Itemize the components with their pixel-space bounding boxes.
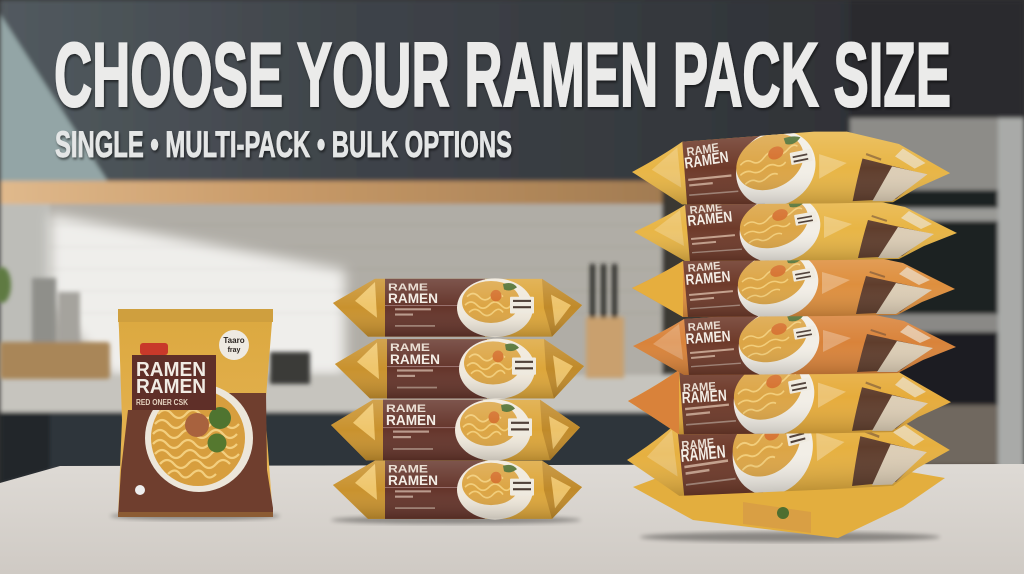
wooden bowl xyxy=(0,342,110,379)
bulk pack 7 (bottom, plain yellow) xyxy=(633,462,945,538)
bulk pack 1: RAMEN xyxy=(684,149,730,173)
multi pack 4: RAME xyxy=(388,464,428,475)
pack shadow xyxy=(110,512,280,520)
bulk pack 4: RAME xyxy=(687,320,721,334)
multi pack 3 xyxy=(331,399,580,461)
bulk pack 3 xyxy=(632,241,955,329)
multi pack 4: RAMEN xyxy=(388,473,438,488)
bulk pack 5: RAMEN xyxy=(681,387,727,408)
multi pack 3: RAMEN xyxy=(386,412,436,428)
bulk pack 6: RAMEN xyxy=(680,442,726,466)
back counter xyxy=(0,375,680,413)
multi pack 3: RAME xyxy=(386,402,426,415)
marble counter top xyxy=(0,464,1024,574)
bulk pack 1 xyxy=(632,119,950,218)
bulk pack 4 xyxy=(633,299,956,387)
multi pack 2: RAME xyxy=(390,343,430,354)
multi-pack stack xyxy=(331,278,584,524)
bulk pack 6: RAME xyxy=(681,437,715,454)
barcode mark xyxy=(135,485,145,495)
bulk pack 2: RAME xyxy=(689,202,723,217)
bulk pack 2: RAMEN xyxy=(687,208,733,230)
multi pack 1: RAMEN xyxy=(388,291,438,306)
sunlight wedge on cabinets xyxy=(0,14,108,182)
bulk stack xyxy=(625,119,957,542)
pack name: RAMEN xyxy=(136,359,206,381)
single pack: RAMEN xyxy=(136,376,206,398)
bulk pack 5 xyxy=(628,347,951,448)
lower cabinets xyxy=(0,412,680,468)
bulk pack 1: RAME xyxy=(686,141,720,159)
sticker: fray xyxy=(228,347,241,354)
upper cabinets xyxy=(0,0,860,182)
multi pack 1 xyxy=(333,278,582,337)
plant xyxy=(0,267,11,303)
bulk pack 5: RAME xyxy=(683,380,716,395)
bowl of ramen xyxy=(145,384,253,492)
stove pot xyxy=(270,352,310,384)
bulk pack 3: RAME xyxy=(687,260,721,275)
sticker xyxy=(219,330,249,360)
background objects xyxy=(0,264,624,384)
pack body xyxy=(118,309,273,517)
bulk pack 2 xyxy=(634,185,957,273)
bulk pack 4: RAMEN xyxy=(685,328,731,348)
multi pack 2 xyxy=(335,339,584,399)
bulk pack 6 xyxy=(625,388,952,513)
shelf xyxy=(0,181,680,204)
single pack xyxy=(110,309,280,520)
utensil jars xyxy=(32,278,56,342)
subtitle: SINGLE • MULTI-PACK • BULK OPTIONS xyxy=(55,124,512,165)
flavour line: RED ONER CSK xyxy=(136,398,188,407)
red badge xyxy=(140,343,168,355)
brown lower panel xyxy=(118,393,273,517)
tiled backsplash xyxy=(0,204,680,376)
title box on pack xyxy=(132,355,216,410)
knife block xyxy=(586,317,624,378)
right wall and oven xyxy=(662,182,1024,468)
multi pack 1: RAME xyxy=(388,282,428,293)
multi pack 2: RAMEN xyxy=(390,352,440,367)
bulk pack 3: RAMEN xyxy=(685,268,731,289)
multi pack 4 xyxy=(333,460,582,519)
sticker: Taaro xyxy=(223,336,245,345)
